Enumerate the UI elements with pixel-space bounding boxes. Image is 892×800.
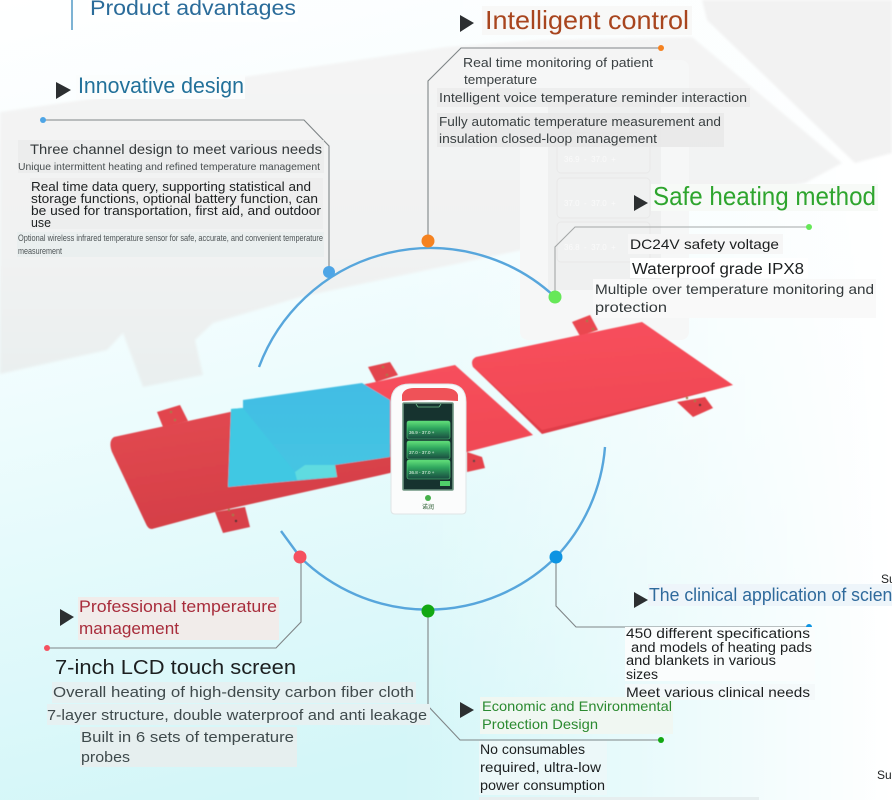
panel: clinical application <box>625 572 892 782</box>
text: innovative design points: be used for transportation, first aid, and outdoor <box>31 203 322 218</box>
text: innovative design points: Unique intermittent heating and refined temperature management <box>18 161 320 173</box>
device screen <box>403 403 453 490</box>
ghost monitor backdrop: 36.9 - 37.0 + <box>564 155 616 164</box>
tab rivets <box>170 320 701 522</box>
text: economic points <box>479 741 759 800</box>
ghost monitor backdrop: 36.8 - 37.0 + <box>564 243 616 252</box>
red pad right <box>472 322 733 433</box>
text: intelligent control points: Intelligent voice temperature reminder interaction <box>439 90 747 105</box>
text: intelligent control points: Fully automatic temperature measurement and <box>439 114 721 129</box>
text: safe heating points <box>593 234 876 318</box>
text: intelligent control points: temperature <box>464 72 537 87</box>
text: intelligent control points: Real time monitoring of patient <box>463 55 653 70</box>
text: safe heating points: DC24V safety voltage <box>630 236 779 252</box>
text: intelligent control points: insulation closed-loop management <box>439 131 657 146</box>
connector lines <box>43 48 809 740</box>
heading: professional temperature management <box>60 597 279 640</box>
heading: innovative design: Innovative design <box>78 73 244 98</box>
text: innovative design points: measurement <box>18 246 62 257</box>
ghost monitor backdrop: 37.0 - 37.0 + <box>564 199 616 208</box>
text: professional temperature points: Overall heating of high-density carbon fiber cloth <box>53 684 414 701</box>
text: innovative design points: Three channel design to meet various needs <box>30 141 322 157</box>
panel: professional temperature management <box>47 597 430 767</box>
panel: innovative design <box>17 73 324 257</box>
heading: economic and environmental protection design: Protection Design <box>482 716 598 732</box>
text: professional temperature points <box>47 657 430 767</box>
text: safe heating points: Multiple over temperature monitoring and <box>595 281 874 297</box>
text: innovative design points: Optional wireless infrared temperature sensor for safe, accurate, and convenient temperature <box>18 233 323 244</box>
product: heating pads and blankets <box>110 315 733 533</box>
text: innovative design points: use <box>31 215 51 230</box>
text: economic points: No consumables <box>480 741 585 757</box>
text: clinical application points: 450 different specifications <box>626 626 810 641</box>
text: professional temperature points: probes <box>81 749 130 766</box>
ring <box>259 248 605 610</box>
stray clipped labels <box>877 572 892 782</box>
node dots <box>40 45 812 743</box>
text: professional temperature points: 7-inch LCD touch screen <box>55 657 296 679</box>
text: economic points: required, ultra-low <box>480 759 602 775</box>
text: safe heating points: Waterproof grade IPX8 <box>632 261 804 278</box>
device screen: 36.9 - 37.0 + <box>409 430 435 435</box>
device screen: 36.8 - 37.0 + <box>409 470 435 475</box>
heading: safe heating method: Safe heating method <box>653 181 876 211</box>
panel: economic and environmental protection design <box>460 697 759 800</box>
text: intelligent control points <box>437 55 750 147</box>
text: clinical application points: Meet various clinical needs <box>626 684 810 700</box>
heading: professional temperature management: management <box>79 620 179 638</box>
text: innovative design points: storage functions, optional battery function, can <box>31 191 318 206</box>
section heading: product advantages <box>71 0 298 30</box>
heading: economic and environmental protection design: Economic and Environmental <box>482 698 672 714</box>
text: economic points: power consumption <box>480 777 605 793</box>
text: professional temperature points: 7-layer structure, double waterproof and anti leakage <box>47 707 427 724</box>
device: temperature controller <box>391 384 466 514</box>
panel: intelligent control <box>437 5 750 147</box>
stray clipped labels: Su <box>877 768 892 782</box>
heading: economic and environmental protection design <box>460 697 673 734</box>
heading: intelligent control: Intelligent control <box>485 5 689 35</box>
red pad middle <box>366 365 533 466</box>
text: clinical application points: and blankets in various <box>626 653 776 668</box>
red pad left <box>110 374 420 529</box>
text: innovative design points: Real time data query, supporting statistical and <box>31 179 311 194</box>
text: clinical application points: and models of heating pads <box>631 640 812 655</box>
text: innovative design points <box>17 140 324 257</box>
ghost monitor backdrop <box>520 60 689 340</box>
heading: professional temperature management: Professional temperature <box>79 598 277 616</box>
text: safe heating points: protection <box>595 299 667 315</box>
text: professional temperature points: Built in 6 sets of temperature <box>81 729 294 746</box>
ghost hospital bed backdrop <box>0 0 892 387</box>
text: clinical application points: sizes <box>626 667 658 682</box>
text: clinical application points <box>625 626 815 700</box>
tabs <box>157 315 713 533</box>
device screen: 37.0 - 37.0 + <box>409 450 435 455</box>
blue cloth <box>228 383 390 487</box>
panel: safe heating method <box>593 181 878 318</box>
device logo: 诺润 <box>422 503 434 511</box>
